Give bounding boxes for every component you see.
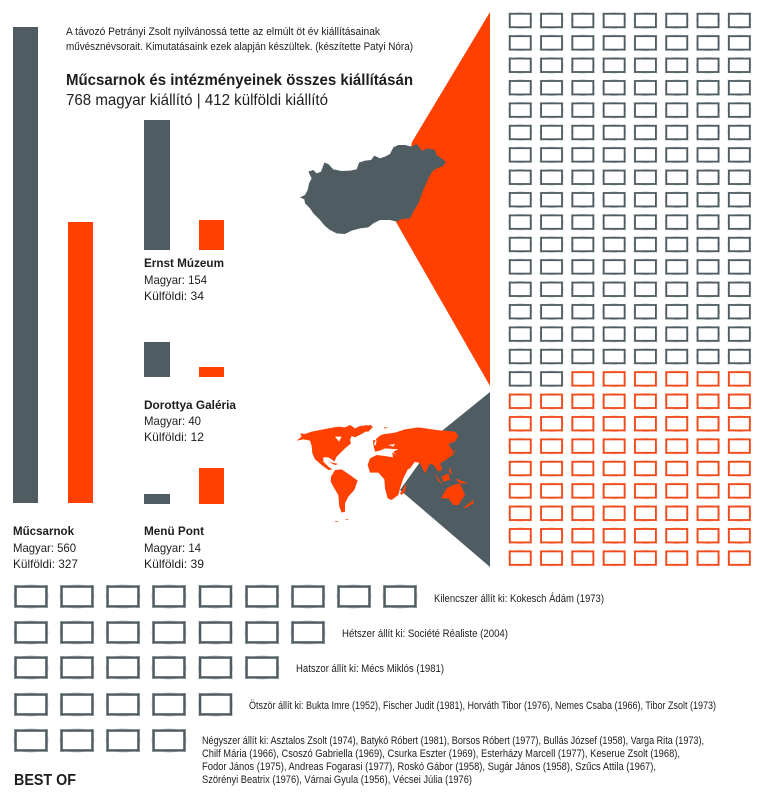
frames: four exhibitions	[14, 729, 186, 752]
frames: five exhibitions	[14, 693, 232, 716]
wedge: world (gray)	[400, 392, 490, 567]
text: seven exhibitions: Hétszer állít ki: Société Réaliste (2004)	[342, 628, 508, 640]
title: Műcsarnok és intézményeinek összes kiállításán	[66, 72, 413, 89]
label: Menü Pont: Magyar: 14	[144, 541, 201, 555]
label: Műcsarnok: Műcsarnok	[13, 524, 74, 538]
bars: Ernst Múzeum	[144, 120, 224, 250]
pictogram grid: foreign artists (orange frames)	[509, 371, 751, 566]
text: four exhibitions	[202, 735, 704, 786]
text: four exhibitions: Szörényi Beatrix (1976), Várnai Gyula (1956), Vécsei Júlia (1976)	[202, 774, 472, 786]
frames: seven exhibitions	[14, 621, 325, 644]
label: Dorottya Galéria: Külföldi: 12	[144, 430, 204, 444]
label: Ernst Múzeum: Ernst Múzeum	[144, 256, 224, 270]
label: Ernst Múzeum: Külföldi: 34	[144, 289, 204, 303]
label: Ernst Múzeum	[144, 256, 224, 303]
frames: nine exhibitions	[14, 585, 417, 608]
map: world	[297, 425, 473, 522]
text: four exhibitions: Chilf Mária (1966), Csoszó Gabriella (1969), Csurka Eszter (1969), Esterházy Marcell (1977), Keserue Zsolt (1968),	[202, 748, 680, 760]
label: Dorottya Galéria	[144, 398, 236, 444]
label: Menü Pont	[144, 524, 204, 571]
wedge: Hungary (orange)	[396, 12, 490, 386]
frames: six exhibitions	[14, 656, 279, 679]
label: Ernst Múzeum: Magyar: 154	[144, 273, 207, 287]
intro text	[66, 26, 413, 53]
label: Dorottya Galéria: Magyar: 40	[144, 414, 201, 428]
text: nine exhibitions: Kilencszer állít ki: Kokesch Ádám (1973)	[434, 592, 604, 605]
bars: Dorottya Galéria	[144, 342, 224, 377]
intro text: A távozó Petrányi Zsolt nyilvánossá tette az elmúlt öt év kiállításainak	[66, 26, 380, 38]
label: Műcsarnok	[13, 524, 78, 571]
bars: Műcsarnok	[13, 27, 93, 503]
map: Hungary	[300, 144, 446, 234]
label: Menü Pont: Menü Pont	[144, 524, 204, 538]
label: Menü Pont: Külföldi: 39	[144, 557, 204, 571]
text: six exhibitions: Hatszor állít ki: Mécs Miklós (1981)	[296, 663, 444, 675]
pictogram grid: Hungarian artists (gray frames)	[509, 13, 751, 387]
heading: BEST OF: BEST OF	[14, 772, 76, 789]
text: four exhibitions: Fodor János (1975), Andreas Fogarasi (1977), Roskó Gábor (1958), Sugár János (1958), Szűcs Attila (1967),	[202, 761, 656, 773]
subtitle: 768 magyar kiállító | 412 külföldi kiállító	[66, 92, 328, 109]
label: Dorottya Galéria: Dorottya Galéria	[144, 398, 236, 412]
label: Műcsarnok: Magyar: 560	[13, 541, 76, 555]
bars: Menü Pont	[144, 468, 224, 504]
label: Műcsarnok: Külföldi: 327	[13, 557, 78, 571]
intro text: művésznévsorait. Kimutatásaink ezek alapján készültek. (készítette Patyi Nóra)	[66, 41, 413, 53]
